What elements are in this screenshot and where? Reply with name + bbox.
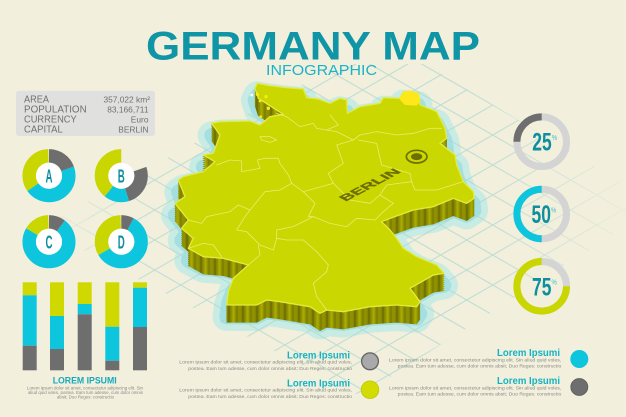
legend item: cyan: postea. Eam tum adesse, cum dolor omnis absit; Duo Reges: constructio: [398, 364, 562, 369]
isometric street grid: [40, 64, 626, 396]
map top surface: [175, 83, 474, 313]
legend item: grey: postea. Eam tum adesse, cum dolor omnis absit; Duo Reges: constructio: [188, 366, 352, 371]
donut chart B: B: [118, 165, 125, 186]
Berlin marker: [406, 150, 427, 163]
subtitle: INFOGRAPHIC: [266, 62, 377, 79]
progress ring 75%: %: [552, 280, 557, 287]
legend item: yellow: Lorem ipsum dolor sit amet, consectetur adipiscing elit. Sin aliud quid voles,: [179, 388, 352, 393]
panel: country facts: POPULATION: [24, 105, 87, 116]
legend item: grey: Lorem ipsum dolor sit amet, consectetur adipiscing elit. Sin aliud quid voles,: [179, 360, 352, 365]
bar chart caption: absit; Duo Reges: constructio: [57, 394, 115, 399]
panel: country facts: 357,022 km²: [103, 95, 150, 105]
map water glow: [175, 95, 474, 325]
bar chart caption: Lorem ipsum dolor sit amet, consectetur adipiscing elit. Sin: [27, 386, 144, 390]
progress ring 50%: %: [551, 207, 556, 214]
donut chart A: [29, 156, 69, 196]
bar chart caption: [27, 376, 144, 399]
bar chart caption: aliud quid voles, postea. Eam tum adesse, cum dolor omnis: [28, 390, 144, 395]
panel: country facts: Euro: [131, 115, 149, 125]
Berlin label: BERLIN: [336, 167, 404, 203]
progress ring 50%: 50: [532, 201, 551, 229]
panel: country facts: CURRENCY: [24, 115, 77, 126]
legend item: yellow: postea. Eam tum adesse, cum dolor omnis absit; Duo Reges: constructio: [188, 394, 352, 399]
legend item: yellow: Lorem Ipsumi: [287, 377, 350, 389]
legend item: yellow: [179, 377, 379, 399]
progress ring 25%: 25: [532, 129, 552, 157]
donut chart C: C: [46, 231, 52, 252]
donut chart D: D: [118, 231, 125, 252]
legend item: dark grey: [389, 375, 588, 397]
legend item: cyan: Lorem ipsum dolor sit amet, consectetur adipiscing elit. Sin aliud quid voles,: [389, 357, 561, 362]
legend item: cyan: [389, 347, 588, 369]
legend item: cyan: Lorem Ipsumi: [497, 347, 560, 359]
title: GERMANY MAP: [146, 24, 480, 68]
legend item: dark grey: Lorem ipsum dolor sit amet, consectetur adipiscing elit. Sin aliud quid voles,: [389, 385, 561, 390]
panel: country facts: [16, 91, 155, 136]
legend item: dark grey: postea. Eam tum adesse, cum dolor omnis absit; Duo Reges: constructio: [398, 392, 562, 397]
progress ring 25%: [517, 117, 566, 166]
map of Germany: [175, 83, 474, 331]
legend item: dark grey: Lorem Ipsumi: [497, 375, 560, 387]
donut chart D: [102, 222, 141, 262]
panel: country facts: 83,166,711: [107, 105, 149, 115]
donut chart B: [102, 156, 141, 196]
map extruded side walls: [175, 85, 474, 331]
donut chart C: [29, 222, 69, 262]
legend item: grey: Lorem Ipsumi: [287, 349, 350, 361]
panel: country facts: CAPITAL: [24, 124, 63, 135]
progress ring 25%: %: [552, 135, 557, 142]
progress ring 75%: [517, 262, 566, 311]
stacked bar chart: [23, 282, 147, 370]
donut chart A: A: [46, 165, 52, 186]
panel: country facts: BERLIN: [118, 124, 148, 134]
progress ring 50%: [517, 189, 566, 239]
legend item: grey: [179, 349, 378, 371]
panel: country facts: AREA: [24, 95, 49, 106]
bar chart caption: LOREM IPSUMI: [53, 376, 117, 386]
progress ring 75%: 75: [532, 273, 551, 301]
islands: [250, 90, 421, 118]
state borders: [188, 113, 463, 310]
